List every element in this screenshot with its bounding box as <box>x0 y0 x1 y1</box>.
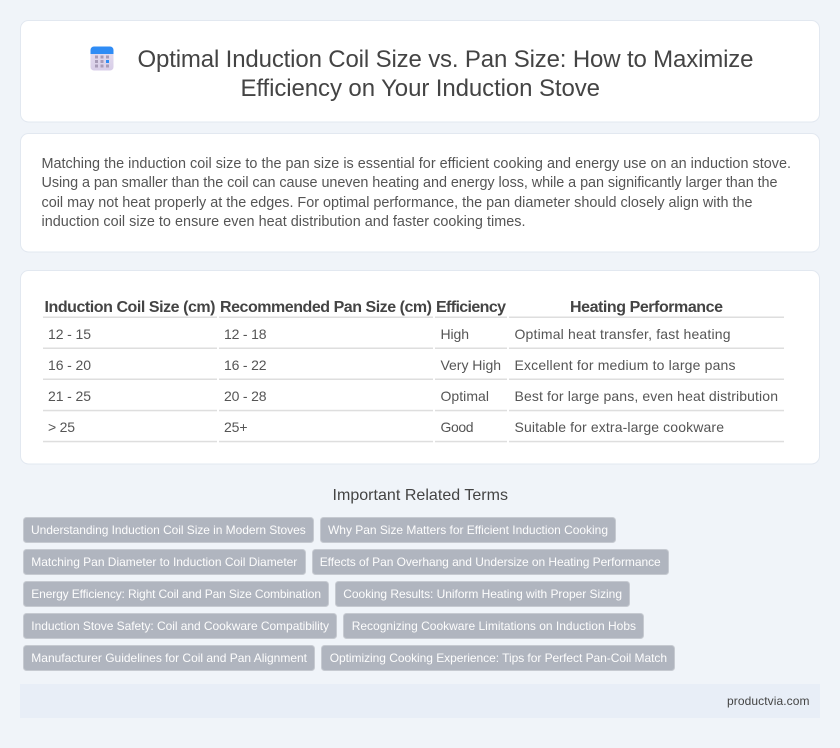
tag: pan size: Why Pan Size Matters for Efficient Induction Cooking <box>328 523 608 537</box>
title <box>138 46 754 102</box>
title: Efficiency on Your Induction Stove <box>240 75 600 102</box>
table row: over 25: 25+ <box>224 419 248 435</box>
table row: 16 - 20 <box>48 357 736 373</box>
table header row: Efficiency <box>436 299 506 316</box>
table row: 16 - 20: Excellent for medium to large pans <box>514 357 736 373</box>
table row: 16 - 20: 16 - 20 <box>48 357 91 373</box>
table header row: Heating Performance <box>570 299 723 316</box>
footer text: productvia.com <box>727 694 810 708</box>
table row: 12 - 15: High <box>440 326 469 342</box>
panel: intro paragraph <box>20 134 820 252</box>
tag: energy efficiency: Energy Efficiency: Right Coil and Pan Size Combination <box>31 587 321 601</box>
table header row: Recommended Pan Size (cm) <box>220 299 432 316</box>
panel: table <box>20 270 820 464</box>
tag: manufacturer guidelines: Manufacturer Guidelines for Coil and Pan Alignment <box>31 651 308 665</box>
table row: 12 - 15: Optimal heat transfer, fast heating <box>514 326 730 342</box>
text: intro paragraph: coil may not heat properly at the edges. For optimal performance, the pan diameter should closely align with the <box>42 195 752 211</box>
tag: pan size <box>320 518 616 542</box>
table row: over 25 <box>48 419 724 435</box>
tag: cooking results: Cooking Results: Uniform Heating with Proper Sizing <box>343 587 622 601</box>
table row: 21 - 25 <box>48 388 778 404</box>
table row: 21 - 25: Best for large pans, even heat distribution <box>514 388 778 404</box>
tag: overhang: Effects of Pan Overhang and Undersize on Heating Performance <box>320 555 661 569</box>
tag: matching diameter <box>24 550 306 574</box>
tag: optimizing experience: Optimizing Cooking Experience: Tips for Perfect Pan-Coil Match <box>330 651 667 665</box>
tag: safety: Induction Stove Safety: Coil and Cookware Compatibility <box>31 619 329 633</box>
tag: optimizing experience <box>322 646 674 670</box>
panel: header <box>20 20 820 122</box>
table row: 12 - 15: 12 - 15 <box>48 326 91 342</box>
table row: 16 - 20: Very High <box>440 357 501 373</box>
table header row: Induction Coil Size (cm) <box>44 299 216 316</box>
table row: 21 - 25: Optimal <box>440 388 489 404</box>
tag: safety <box>24 614 336 638</box>
tag: cooking results <box>336 582 630 606</box>
table row: 16 - 20: 16 - 22 <box>224 357 267 373</box>
tag: energy efficiency <box>24 582 328 606</box>
table row: 21 - 25: 20 - 28 <box>224 388 267 404</box>
table row: over 25: > 25 <box>48 419 75 435</box>
tag: cookware limitations: Recognizing Cookware Limitations on Induction Hobs <box>352 619 636 633</box>
tag: matching diameter: Matching Pan Diameter to Induction Coil Diameter <box>31 555 297 569</box>
related term tags <box>24 518 674 670</box>
icon: calendar <box>90 46 114 70</box>
text: intro paragraph <box>42 156 791 230</box>
text: intro paragraph: Matching the induction coil size to the pan size is essential for efficient cooking and energy use on an induction stove. <box>42 156 791 172</box>
text: intro paragraph: Using a pan smaller than the coil can cause uneven heating and energy loss, while a pan significantly larger than the <box>42 175 778 191</box>
text: intro paragraph: induction coil size to ensure even heat distribution and faster cooking times. <box>42 214 526 230</box>
tag: cookware limitations <box>344 614 644 638</box>
heading: related terms: Important Related Terms <box>332 487 508 504</box>
table row: 12 - 15 <box>48 326 730 342</box>
title: Optimal Induction Coil Size vs. Pan Size: How to Maximize <box>138 46 754 73</box>
table row: over 25: Good <box>440 419 474 435</box>
tag: manufacturer guidelines <box>24 646 314 670</box>
table row: 12 - 15: 12 - 18 <box>224 326 267 342</box>
table row: over 25: Suitable for extra-large cookware <box>514 419 724 435</box>
tag: induction coil size <box>24 518 314 542</box>
tag: induction coil size: Understanding Induction Coil Size in Modern Stoves <box>31 523 306 537</box>
footer bar <box>20 684 820 718</box>
table row: 21 - 25: 21 - 25 <box>48 388 91 404</box>
table header row <box>44 299 723 316</box>
tag: overhang <box>312 550 668 574</box>
